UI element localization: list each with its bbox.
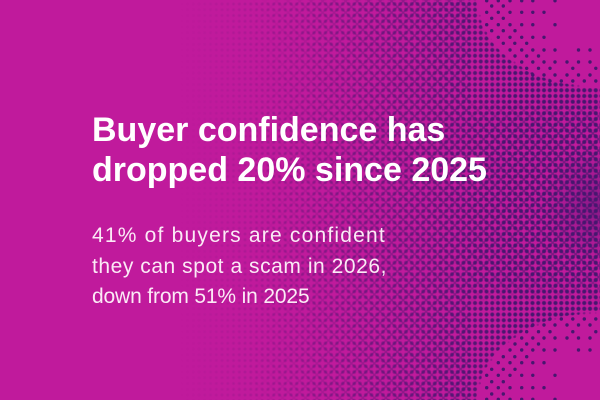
title: dropped 20% since 2025 [92, 151, 487, 189]
subtitle text [92, 224, 387, 308]
subtitle text: down from 51% in 2025 [92, 285, 309, 308]
title: Buyer confidence has [92, 111, 445, 149]
subtitle text: they can spot a scam in 2026, [92, 254, 387, 278]
subtitle text: 41% of buyers are confident [92, 224, 386, 247]
halftone dot pattern [210, 0, 600, 400]
title [92, 111, 487, 189]
